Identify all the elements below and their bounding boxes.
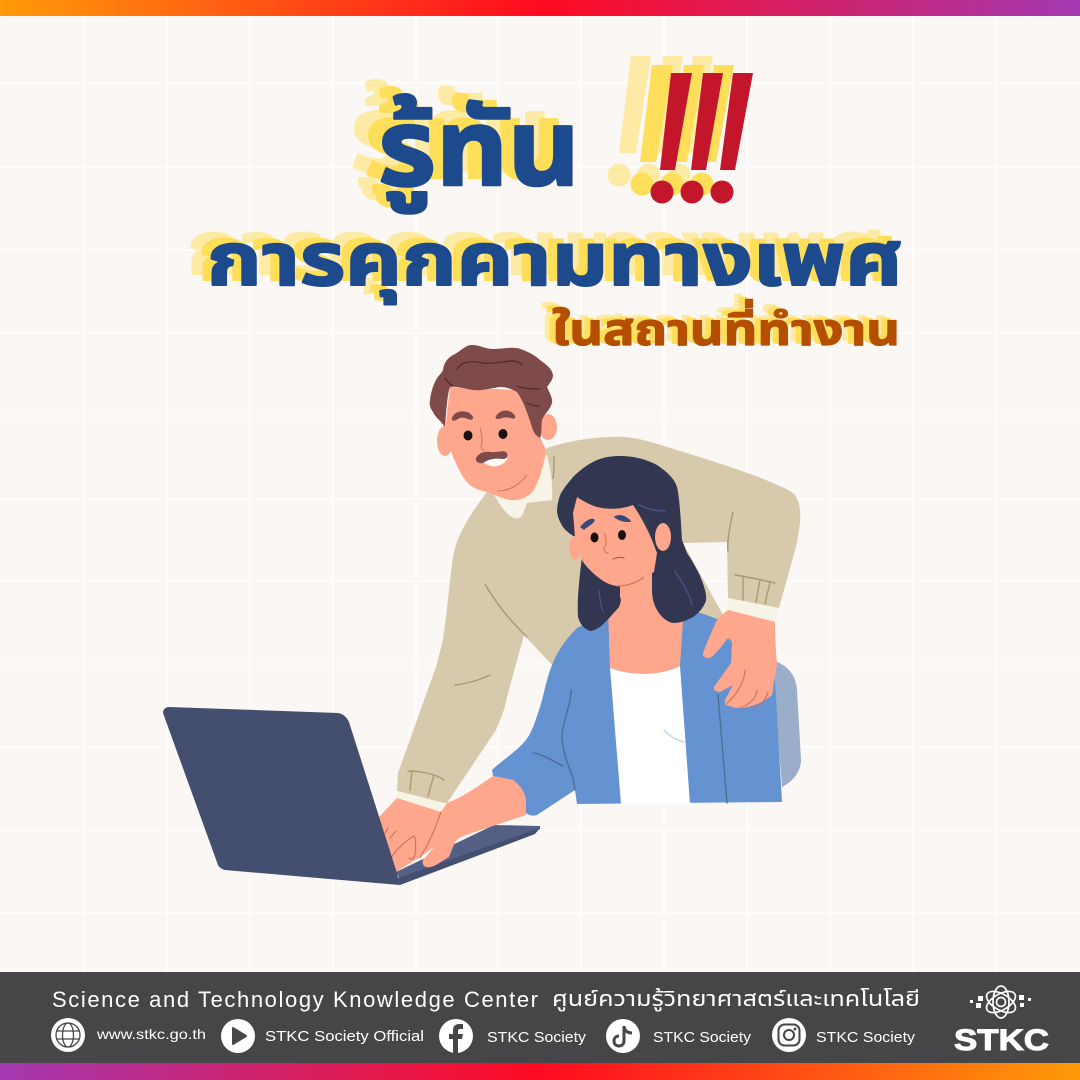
title line 2: การคุกคามทางเพศ: [207, 218, 903, 305]
woman's neck: [620, 560, 652, 592]
logo emblem: [983, 986, 1019, 1018]
woman's jacket: [492, 610, 782, 816]
website text: www.stkc.go.th: [96, 1026, 206, 1042]
icon: play: [221, 1019, 255, 1053]
woman's chest and neck: [608, 552, 683, 674]
man's hand on shoulder: [703, 610, 777, 708]
title line 3: ในสถานที่ทำงาน: [546, 297, 894, 353]
title line 2: การคุกคามทางเพศ: [198, 213, 894, 300]
logo: STKC: [954, 986, 1049, 1057]
man's ears: [437, 426, 453, 456]
title line 3: ในสถานที่ทำงาน: [552, 299, 900, 355]
woman's white shirt: [610, 666, 690, 804]
title line 1: รู้ทัน: [350, 74, 552, 199]
icon: exclamation marks: [608, 56, 753, 204]
hand lines on shoulder: [727, 670, 768, 708]
tiktok text: STKC Society: [653, 1029, 752, 1046]
sweater fold lines: [408, 456, 775, 796]
man's hair lines and face details: [445, 361, 540, 406]
logo wordmark: STKC: [954, 1024, 1049, 1057]
instagram text: STKC Society: [816, 1029, 916, 1046]
title line 3: ในสถานที่ทำงาน: [541, 294, 889, 350]
title line 3: [541, 294, 900, 355]
collar: [493, 455, 552, 519]
woman's hand on keyboard: [411, 776, 526, 867]
chair: [772, 660, 801, 787]
icon: globe: [51, 1018, 85, 1052]
laptop base: [396, 825, 540, 885]
icon: tiktok: [606, 1019, 640, 1053]
footer title thai: ศูนย์ความรู้วิทยาศาสตร์และเทคโนโลยี: [552, 987, 920, 1012]
woman's ears: [569, 536, 581, 560]
man's head: [445, 387, 546, 500]
man's cuffs: [727, 598, 779, 622]
man's hand on keyboard: [379, 798, 441, 872]
icon: facebook: [439, 1019, 473, 1053]
woman's face details: [581, 505, 692, 612]
footer panel: [0, 972, 1080, 1063]
title line 1: รู้ทัน: [364, 81, 566, 206]
youtube text: STKC Society Official: [265, 1028, 424, 1045]
title line 1: รู้ทัน: [378, 88, 580, 213]
title line 2: [187, 207, 903, 305]
hand lines: [385, 812, 441, 859]
top gradient bar: [0, 0, 1080, 16]
illustration: man leaning over woman at laptop: [163, 345, 801, 885]
woman's face: [573, 497, 657, 586]
bottom gradient bar: [0, 1063, 1080, 1080]
man's sweater: [397, 437, 800, 803]
woman's hair: [557, 456, 706, 631]
icon: instagram: [772, 1018, 806, 1052]
man's hair: [430, 345, 553, 438]
title line 2: การคุกคามทางเพศ: [187, 207, 883, 294]
footer title english: Science and Technology Knowledge Center: [52, 987, 538, 1012]
facebook text: STKC Society: [487, 1029, 587, 1046]
jacket details: [533, 690, 727, 803]
laptop screen: [163, 707, 400, 885]
